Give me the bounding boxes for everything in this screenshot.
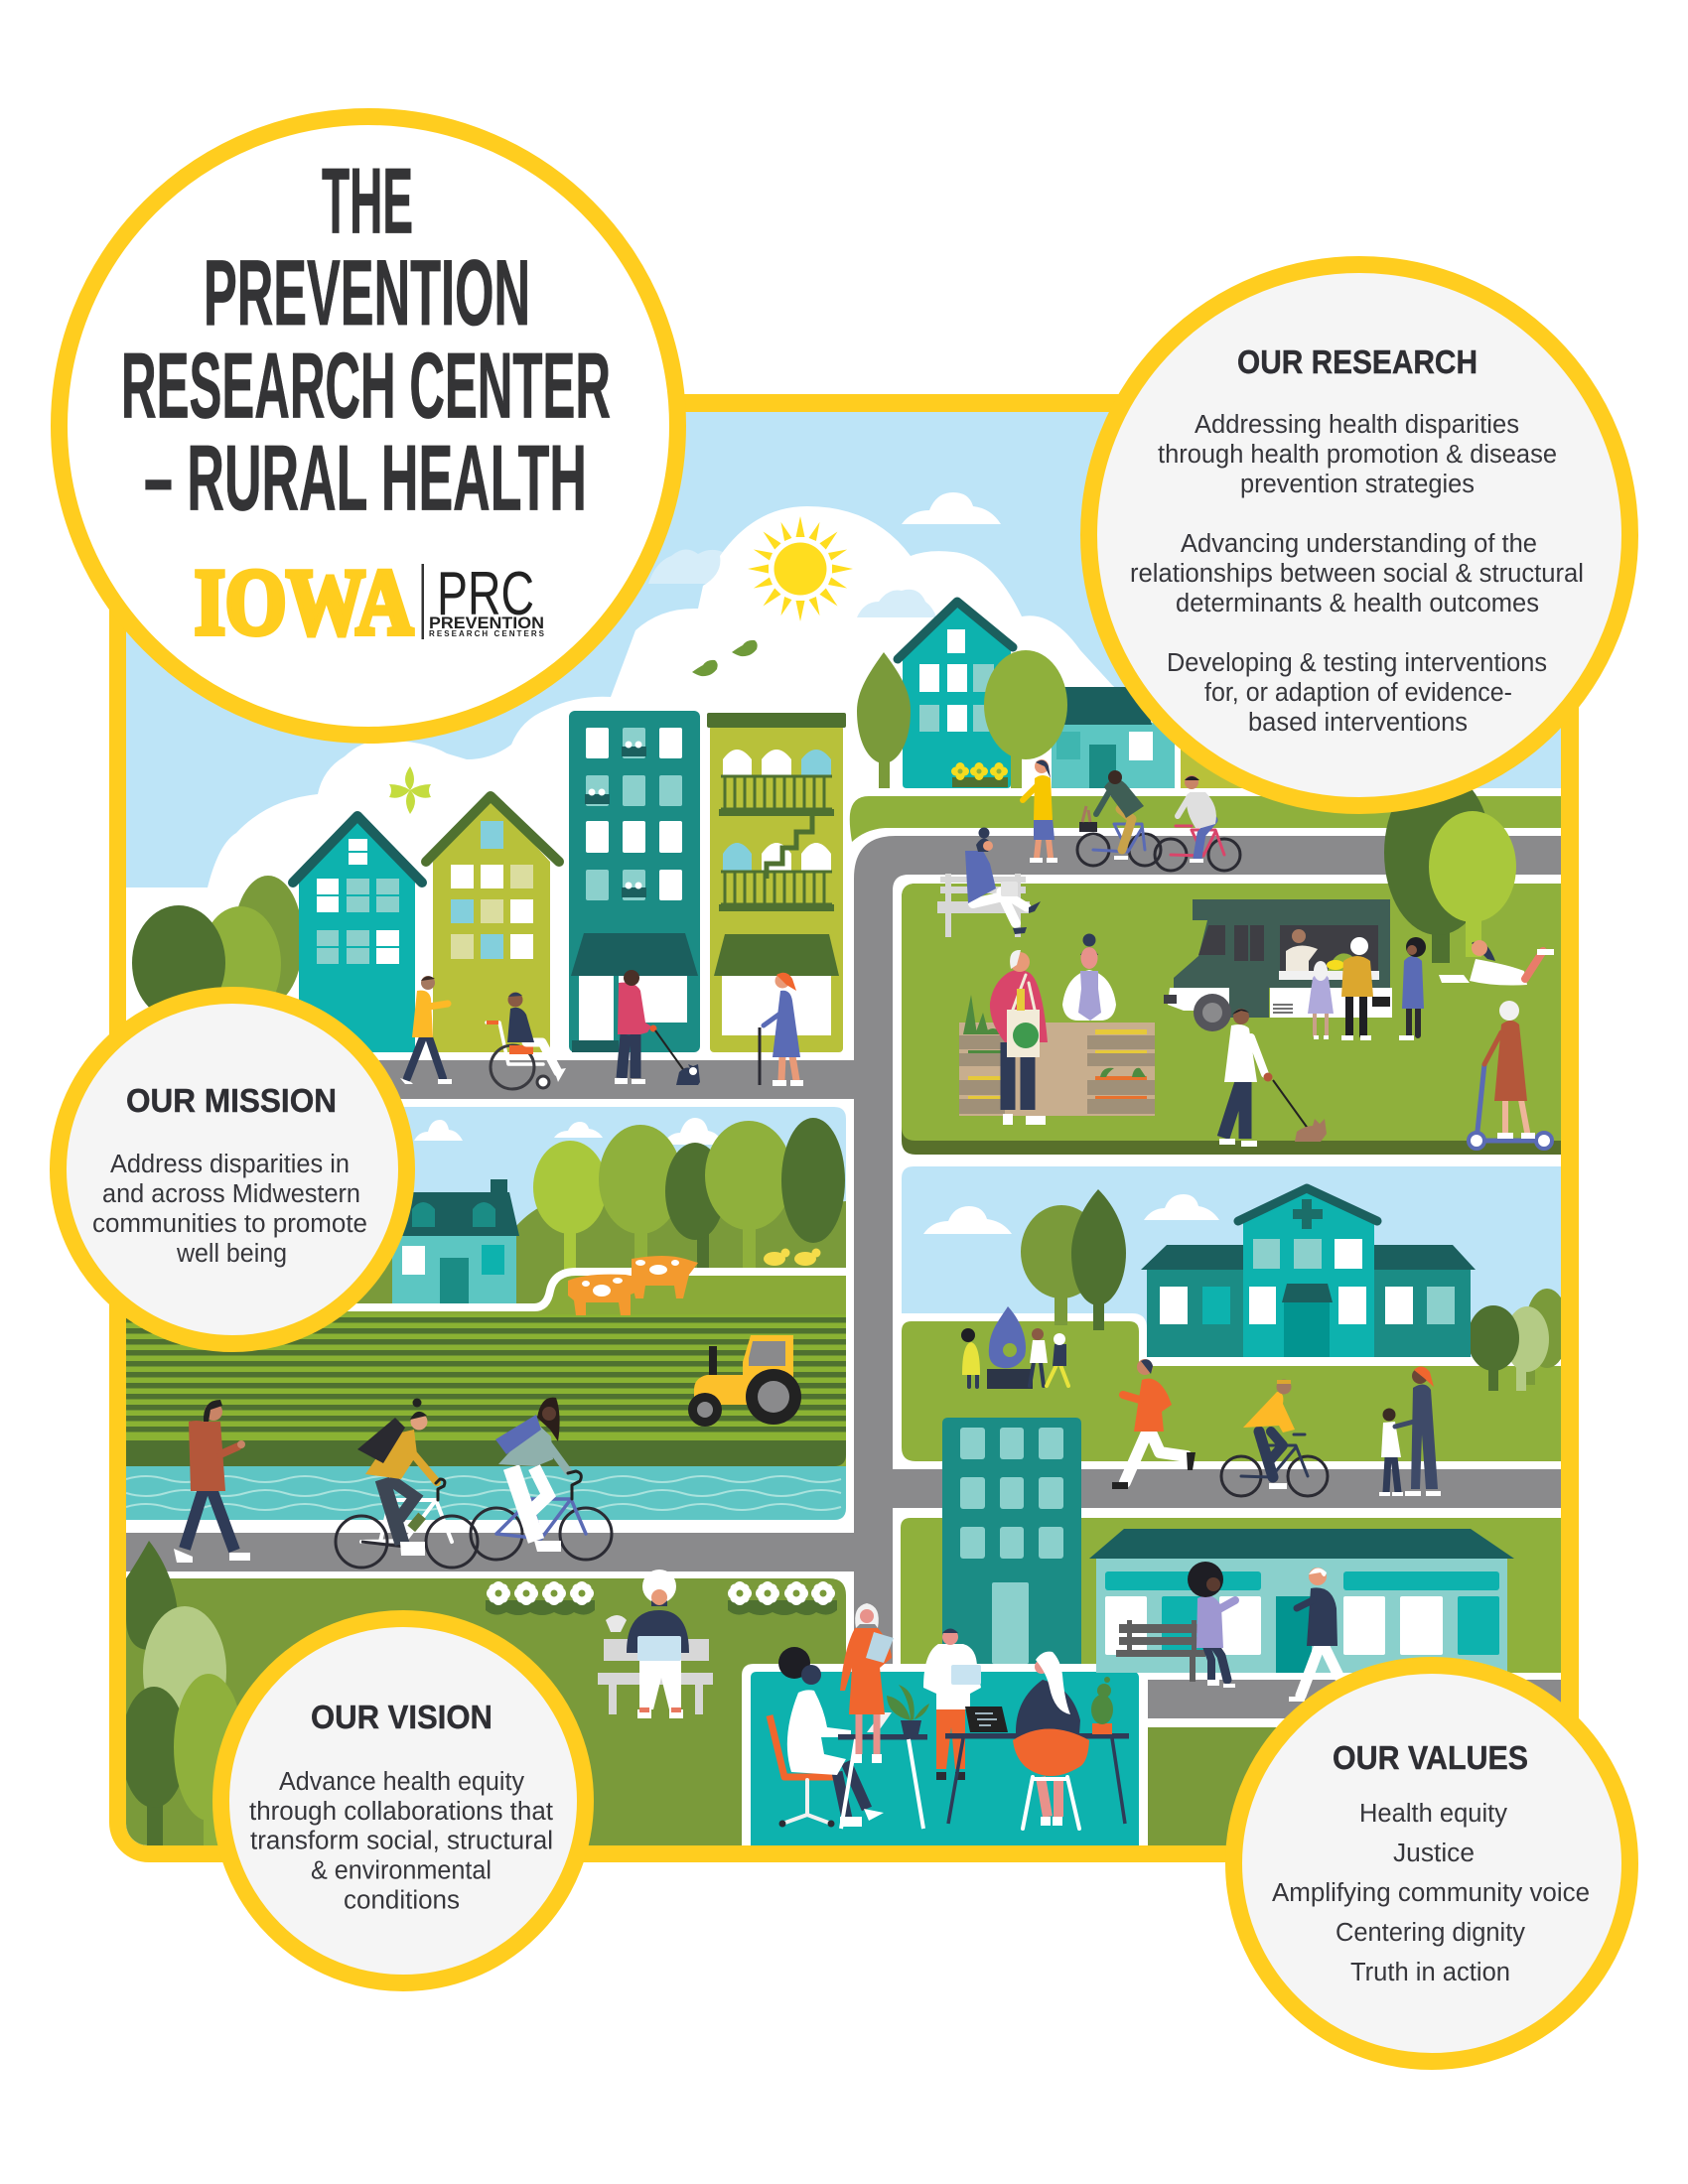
pale cloud behind the sun bbox=[648, 550, 723, 584]
person lying with laptop bbox=[1439, 940, 1554, 985]
customer blue bbox=[1399, 937, 1426, 1040]
person on garden bench with laptop bbox=[598, 1570, 713, 1718]
food truck bbox=[1164, 899, 1392, 1031]
panel: lower left garden bbox=[126, 1578, 846, 1845]
sky bbox=[126, 412, 1561, 1845]
panel: market park bbox=[902, 884, 1561, 1155]
back street houses bbox=[898, 602, 1253, 788]
vision circle bbox=[220, 1618, 586, 1983]
values list: Health equity bbox=[1359, 1800, 1507, 1828]
vision text: through collaborations that bbox=[249, 1798, 553, 1826]
research text: for, or adaption of evidence- bbox=[1204, 679, 1512, 707]
yellow scene frame bbox=[109, 394, 1579, 1862]
desk plant left bbox=[887, 1685, 929, 1734]
adult and child walking bbox=[1379, 1366, 1441, 1496]
olive apartment block bbox=[707, 713, 846, 1052]
logo: Iowa: IOWA bbox=[195, 551, 413, 654]
wheelchair user bbox=[487, 993, 566, 1089]
desk right bbox=[945, 1733, 1129, 1824]
logo: PRC: PRC bbox=[437, 560, 534, 628]
woman with cane bbox=[760, 973, 803, 1086]
desk plant right bbox=[1091, 1677, 1113, 1734]
title: RESEARCH CENTER bbox=[121, 334, 611, 437]
person sitting on street bench bbox=[1188, 1562, 1235, 1688]
man in white hoodie bbox=[923, 1628, 981, 1780]
research text: Developing & testing interventions bbox=[1167, 649, 1547, 677]
farm house bbox=[392, 1179, 519, 1305]
chicks bbox=[764, 1249, 820, 1266]
dog walker bbox=[1219, 1009, 1327, 1147]
clouds over farm bbox=[414, 1118, 724, 1145]
mission text bbox=[92, 1151, 367, 1268]
vision text: Advance health equity bbox=[279, 1768, 524, 1796]
teal house bbox=[293, 816, 422, 1052]
crop stripes bbox=[126, 1317, 846, 1466]
panel: lower right garden bbox=[1148, 1727, 1277, 1845]
seated colleague at left desk bbox=[770, 1647, 884, 1827]
mission text: well being bbox=[176, 1240, 287, 1268]
desk left bbox=[838, 1734, 927, 1829]
title bbox=[121, 149, 611, 530]
window boxes bbox=[585, 741, 646, 897]
farm walker bbox=[174, 1400, 250, 1563]
values circle bbox=[1233, 1666, 1630, 2061]
vision text bbox=[249, 1768, 553, 1914]
mission text: and across Midwestern bbox=[102, 1180, 360, 1208]
illustrated town scene bbox=[121, 412, 1569, 1846]
clinic building bbox=[1141, 1188, 1476, 1357]
storefront building bbox=[1089, 1529, 1514, 1673]
research text: based interventions bbox=[1248, 709, 1468, 737]
values list: Justice bbox=[1393, 1840, 1475, 1867]
values list: Amplifying community voice bbox=[1272, 1879, 1590, 1907]
butterfly bbox=[389, 766, 431, 814]
pale cloud beside back street house bbox=[857, 590, 936, 617]
market stall bbox=[959, 995, 1155, 1116]
logo: PRC: PREVENTION bbox=[429, 614, 544, 632]
big park trees bbox=[1384, 770, 1516, 963]
flower bed right bbox=[728, 1581, 837, 1615]
customer lilac bbox=[1308, 961, 1334, 1039]
tractor bbox=[688, 1335, 801, 1427]
mission text: communities to promote bbox=[92, 1210, 367, 1238]
woman with long white hair in orange chair bbox=[1013, 1652, 1089, 1829]
street bench bbox=[1116, 1620, 1205, 1682]
green verge strip bbox=[850, 796, 1561, 842]
cyclist with blue backpack bbox=[471, 1398, 612, 1560]
tall teal office block bbox=[942, 1418, 1081, 1664]
birds bbox=[692, 640, 758, 676]
vision text: conditions bbox=[344, 1886, 460, 1914]
research text: relationships between social & structural bbox=[1130, 560, 1584, 588]
person on park bench bbox=[937, 828, 1041, 937]
olive house bbox=[426, 796, 559, 1052]
fresh produce in truck bbox=[1328, 953, 1370, 971]
small white cloud bbox=[902, 492, 1001, 524]
person walking with phone bbox=[1289, 1568, 1338, 1702]
customer mustard bbox=[1341, 937, 1373, 1040]
title: – RURAL HEALTH bbox=[144, 425, 587, 530]
research text: Advancing understanding of the bbox=[1181, 530, 1537, 558]
runner bbox=[1112, 1359, 1196, 1489]
logo: PRC bbox=[429, 560, 545, 638]
teal apartment block bbox=[569, 711, 700, 1052]
truck server bbox=[1286, 929, 1318, 971]
white road verge base bbox=[126, 788, 1561, 1845]
back street trees bbox=[857, 650, 1067, 788]
market shopper with tote bbox=[990, 950, 1048, 1125]
yellow flowers bbox=[951, 762, 1008, 787]
woman in orange with tablet bbox=[840, 1603, 894, 1763]
guide dog bbox=[676, 1064, 700, 1085]
research circle bbox=[1088, 264, 1630, 806]
market vendor bbox=[1062, 933, 1116, 1021]
research text bbox=[1130, 411, 1584, 737]
river bbox=[126, 1466, 846, 1520]
person on scooter bbox=[1469, 1001, 1552, 1149]
field path edge bbox=[298, 1272, 846, 1307]
panel: clinic sky and lawn bbox=[894, 1166, 1561, 1461]
cyclist with black backpack bbox=[336, 1398, 478, 1568]
title: PREVENTION bbox=[204, 240, 530, 344]
panel: lower right lawn bbox=[901, 1518, 1561, 1673]
left village trees bbox=[132, 876, 303, 1022]
research heading: OUR RESEARCH bbox=[1237, 343, 1477, 380]
mission text: Address disparities in bbox=[110, 1151, 350, 1178]
values heading: OUR VALUES bbox=[1333, 1739, 1528, 1776]
research text: prevention strategies bbox=[1240, 471, 1475, 498]
mission heading: OUR MISSION bbox=[126, 1082, 337, 1119]
logo divider bbox=[421, 564, 424, 639]
farm tree line bbox=[533, 1118, 845, 1271]
laptop on desk bbox=[965, 1706, 1008, 1732]
clinic scenery trees bbox=[1021, 1189, 1569, 1391]
garden trees bbox=[121, 1541, 243, 1846]
small brown dog bbox=[1295, 1119, 1327, 1142]
vision text: & environmental bbox=[311, 1856, 492, 1884]
cow: front bbox=[568, 1275, 634, 1315]
road network bbox=[126, 836, 1561, 1718]
water bottle bbox=[407, 1513, 426, 1532]
clinic clouds bbox=[923, 1194, 1219, 1234]
office scene bbox=[770, 1603, 1129, 1829]
research text: through health promotion & disease bbox=[1158, 441, 1557, 469]
panel: farm bbox=[126, 1107, 846, 1520]
large white cloud bank bbox=[126, 506, 1181, 1042]
farm field bbox=[344, 1276, 846, 1466]
research text: determinants & health outcomes bbox=[1176, 590, 1539, 617]
title: THE bbox=[322, 149, 413, 252]
cyclist on right road bbox=[1221, 1380, 1328, 1496]
cow: back bbox=[632, 1256, 698, 1298]
light crop band bbox=[126, 1314, 846, 1440]
values list: Centering dignity bbox=[1336, 1919, 1525, 1947]
logo: PRC: RESEARCH CENTERS bbox=[429, 629, 545, 638]
walker in yellow bbox=[400, 976, 452, 1084]
farm hills bbox=[356, 1201, 846, 1303]
cyclist in grey bbox=[1155, 775, 1240, 871]
cyclist with basket bbox=[1077, 770, 1161, 866]
title circle bbox=[60, 117, 677, 735]
vision heading: OUR VISION bbox=[311, 1699, 492, 1735]
mission circle bbox=[58, 995, 407, 1344]
sun bbox=[748, 516, 853, 621]
person with guide dog bbox=[615, 970, 700, 1085]
flower bed left bbox=[486, 1581, 595, 1615]
values list: Truth in action bbox=[1350, 1959, 1510, 1986]
vision text: transform social, structural bbox=[250, 1827, 553, 1854]
open laptop bbox=[867, 1712, 892, 1732]
research text: Addressing health disparities bbox=[1195, 411, 1519, 439]
sculpture with visitors bbox=[961, 1306, 1068, 1389]
panel: office bbox=[742, 1664, 1148, 1846]
person with yellow top bbox=[1023, 759, 1057, 863]
values list bbox=[1272, 1800, 1590, 1986]
